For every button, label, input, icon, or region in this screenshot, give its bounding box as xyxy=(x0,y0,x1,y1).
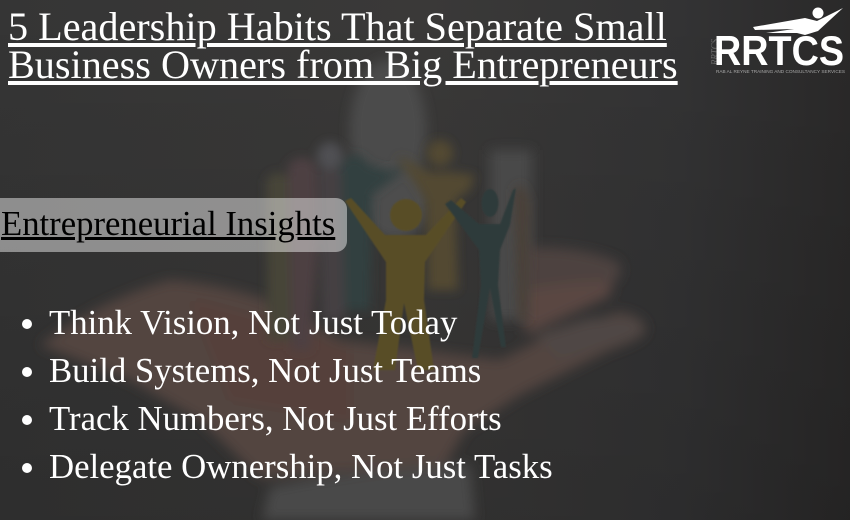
logo: swoosh and figure xyxy=(753,8,843,35)
pale blob behind figures xyxy=(350,60,426,200)
logo: script signature: RRTCS xyxy=(709,39,721,66)
section tag: Entrepreneurial Insights xyxy=(1,204,335,243)
paper figure: yellow xyxy=(345,198,466,370)
paper figure: dark teal xyxy=(445,188,516,358)
bullet list: Build Systems, Not Just Teams xyxy=(49,351,481,390)
bullet list: Delegate Ownership, Not Just Tasks xyxy=(49,447,553,486)
hand: low pale patch xyxy=(262,465,475,520)
bullet list xyxy=(22,303,553,486)
hand: upper fingers xyxy=(525,248,621,325)
bullet list: Track Numbers, Not Just Efforts xyxy=(49,399,502,438)
title xyxy=(8,4,678,87)
logo: RRTCS xyxy=(709,8,845,74)
logo: tagline: RAB AL REYNE TRAINING AND CONSULTANCY SERVICES xyxy=(716,69,845,74)
blurred figures in back xyxy=(266,140,530,350)
section tag xyxy=(0,198,347,252)
bullet list: Think Vision, Not Just Today xyxy=(49,303,457,342)
title: 5 Leadership Habits That Separate Small xyxy=(8,4,667,49)
hand: wrist and palm xyxy=(40,280,645,478)
title: Business Owners from Big Entrepreneurs xyxy=(8,42,678,87)
